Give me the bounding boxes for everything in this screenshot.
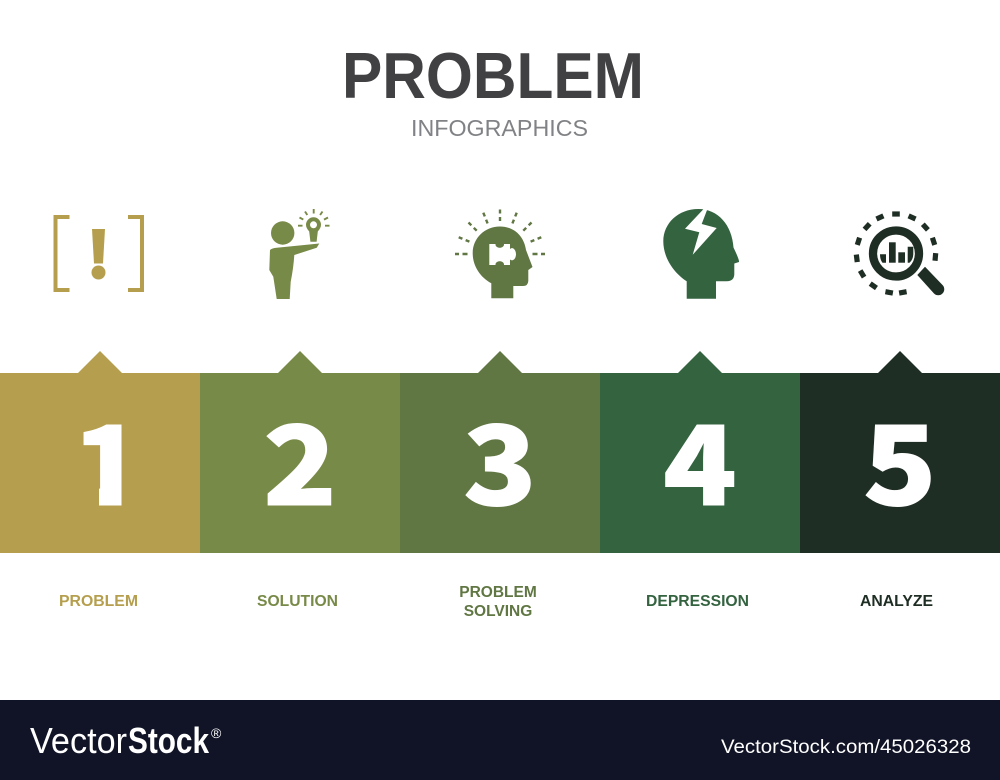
- title: PROBLEM: [342, 39, 644, 112]
- icon: magnifier with bar chart: [856, 214, 944, 295]
- footer bar: [0, 700, 1000, 780]
- footer logo: Vector: [30, 720, 127, 761]
- step 1 panel: [0, 351, 200, 553]
- icon: exclamation in brackets: [54, 215, 144, 292]
- step 2 panel: [200, 351, 400, 553]
- label: solution: SOLUTION: [257, 593, 338, 610]
- label: problem: PROBLEM: [59, 593, 138, 610]
- subtitle: INFOGRAPHICS: [411, 115, 588, 141]
- step 5 panel: [800, 351, 1000, 553]
- label: depression: DEPRESSION: [646, 593, 749, 610]
- footer logo: Stock: [128, 720, 210, 761]
- label: analyze: ANALYZE: [860, 593, 933, 610]
- footer image id: VectorStock.com/45026328: [721, 737, 971, 758]
- icon: head with lightning bolt: [663, 208, 739, 299]
- step 4 panel: [600, 351, 800, 553]
- label: problem solving: SOLVING: [464, 603, 532, 620]
- icon: head with puzzle piece: [455, 210, 545, 298]
- label: problem solving: PROBLEM: [459, 584, 537, 601]
- number 1: 1: [72, 378, 146, 537]
- footer logo: [30, 720, 210, 761]
- number 5: 5: [863, 378, 937, 537]
- number 2: 2: [263, 378, 337, 537]
- number 4: 4: [663, 378, 737, 537]
- number 3: 3: [463, 378, 537, 537]
- step 3 panel: [400, 351, 600, 553]
- registered mark: ®: [211, 725, 222, 741]
- icon: person with light bulb: [269, 209, 330, 299]
